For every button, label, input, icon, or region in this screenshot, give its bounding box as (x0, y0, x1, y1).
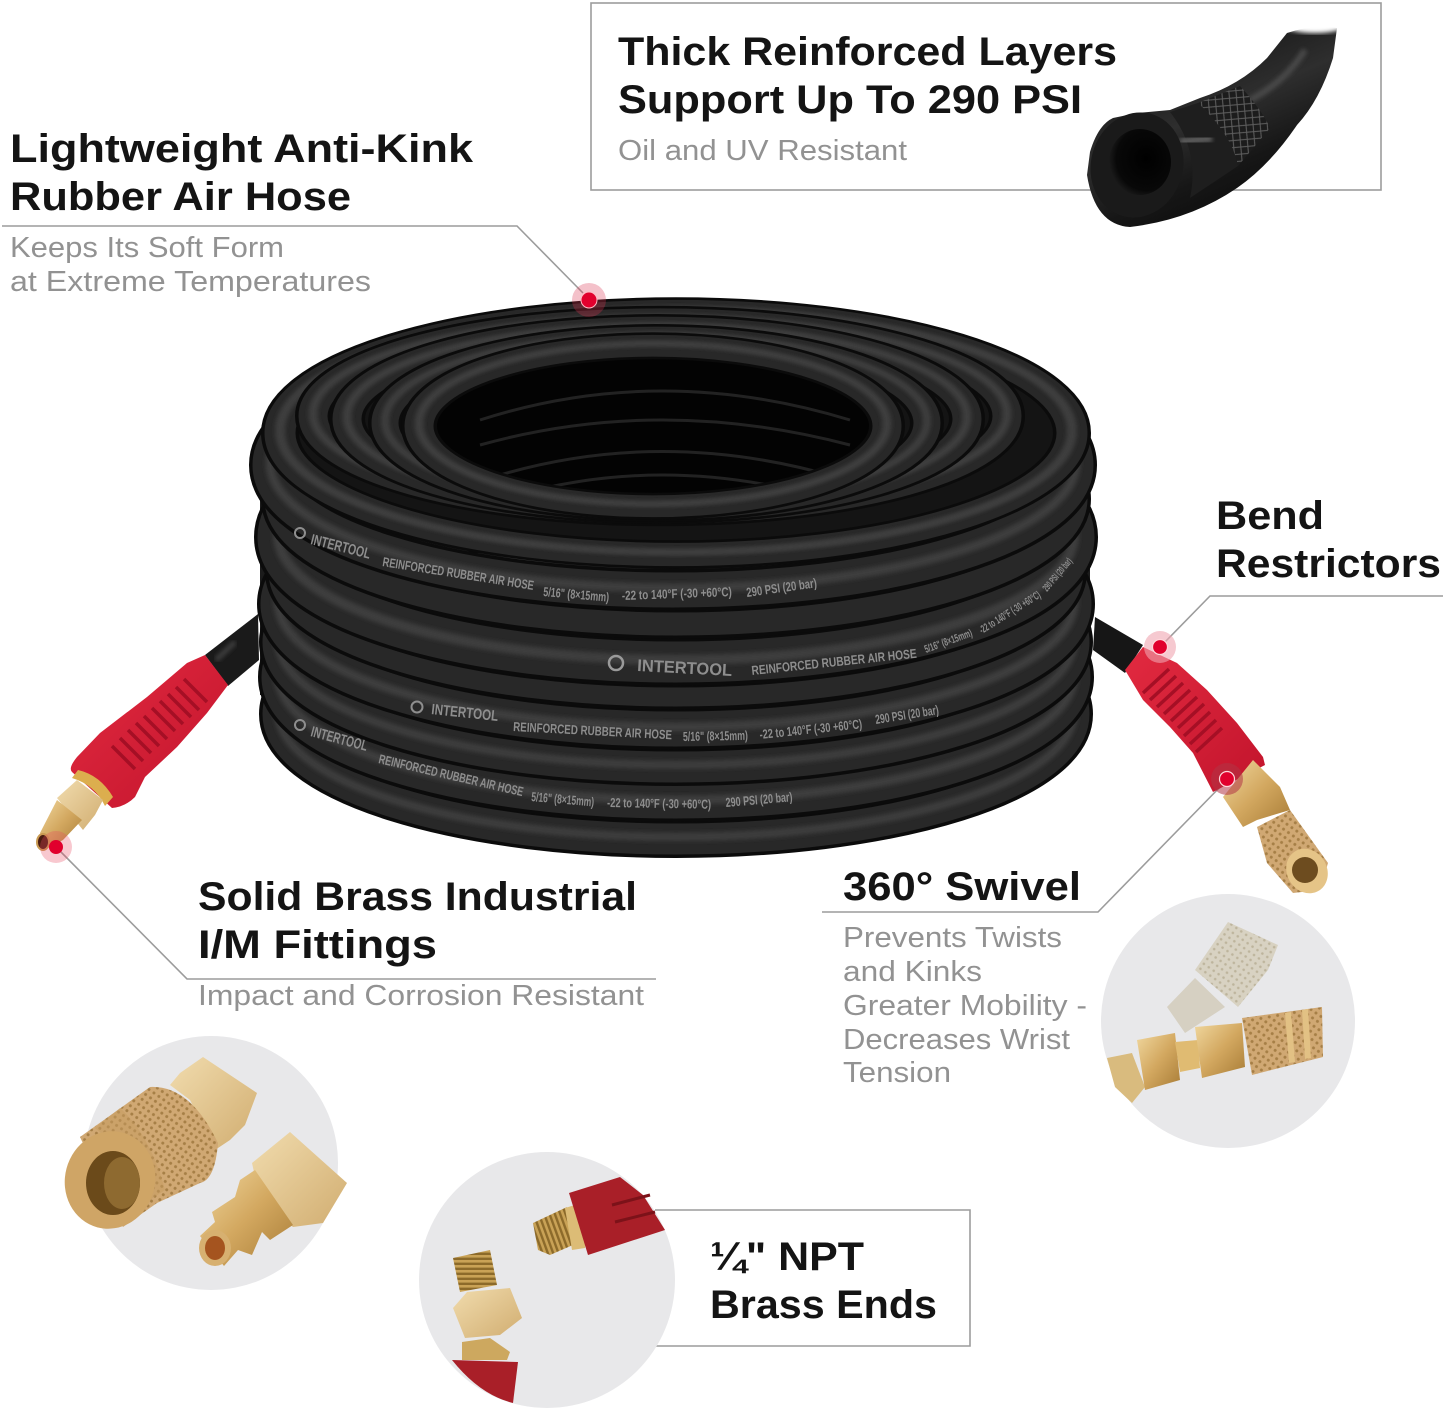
photo circle: swivel fitting (1101, 894, 1355, 1148)
coupler (54, 1057, 257, 1239)
heading: lightweight anti-kink: Lightweight Anti-Kink (10, 127, 474, 171)
marker: brass plug (40, 831, 72, 863)
hose print row 4 (295, 720, 793, 812)
hose print row 2 (609, 556, 1075, 680)
subtext: swivel benefits: and Kinks (843, 956, 982, 988)
panel border (591, 3, 1381, 190)
hose print row 3: REINFORCED RUBBER AIR HOSE (513, 719, 673, 742)
subtext line 1: Keeps Its Soft Form (10, 232, 284, 264)
hose print row 4: REINFORCED RUBBER AIR HOSE (377, 751, 525, 799)
heading: IM fittings: I/M Fittings (198, 923, 437, 967)
heading line 2: Support Up To 290 PSI (618, 78, 1082, 122)
right hose tail with red restrictor and brass coupling (1093, 617, 1336, 901)
hose print row 3: -22 to 140°F (-30 +60°C) (759, 716, 863, 742)
hose print row 4: 290 PSI (20 bar) (725, 789, 793, 810)
red end with thread (533, 1177, 665, 1255)
icon: hose cross-section (1079, 15, 1347, 228)
panel: quarter NPT brass ends (655, 1210, 970, 1346)
ring two (313, 317, 1007, 513)
subtext: swivel benefits: Greater Mobility - (843, 990, 1087, 1022)
ghost swivel position (1167, 922, 1278, 1033)
hose print row 2: INTERTOOL (637, 656, 733, 680)
subtext: impact: Impact and Corrosion Resistant (198, 980, 644, 1012)
solid swivel (1107, 1007, 1323, 1103)
inner coil wall (480, 390, 850, 486)
hose print row 1: 5/16" (8×15mm) (543, 584, 610, 605)
hose print row 3: INTERTOOL (431, 701, 499, 725)
panel: thick reinforced layers (591, 3, 1381, 228)
subtext: oil and UV: Oil and UV Resistant (618, 135, 907, 167)
subtext: swivel benefits: Decreases Wrist (843, 1024, 1070, 1056)
panel border (655, 1210, 970, 1346)
heading: quarter NPT: ¼" NPT (710, 1235, 864, 1279)
hose print row 3: 5/16" (8×15mm) (683, 728, 748, 744)
hose print row 4: -22 to 140°F (-30 +60°C) (607, 795, 711, 812)
hose print row 4: 5/16" (8×15mm) (531, 789, 595, 809)
photo circle: coupler and plug (54, 1036, 347, 1290)
hose print row 2: REINFORCED RUBBER AIR HOSE (751, 646, 918, 678)
front coil rows (270, 338, 1076, 839)
hose print row 1: 290 PSI (20 bar) (745, 575, 818, 600)
heading: restrictors: Restrictors (1216, 542, 1441, 586)
hose print row 1: -22 to 140°F (-30 +60°C) (622, 584, 732, 603)
marker: bend restrictor (1144, 631, 1176, 663)
top coil rings (271, 303, 1081, 563)
ring four (385, 334, 927, 509)
heading: brass ends: Brass Ends (710, 1283, 937, 1327)
hose print row 4: INTERTOOL (309, 723, 369, 755)
heading: solid brass: Solid Brass Industrial (198, 875, 637, 919)
left hose tail with red restrictor and brass plug (37, 614, 259, 850)
marker: top of hose (572, 283, 606, 317)
swivel end with thread (452, 1250, 522, 1403)
hose print row 2: 5/16" (8×15mm) (923, 627, 974, 656)
inner ring (419, 344, 887, 506)
panel: solid brass fittings (198, 875, 644, 1012)
heading line 2: Rubber Air Hose (10, 175, 351, 219)
plug (199, 1132, 347, 1266)
hose print row 1: REINFORCED RUBBER AIR HOSE (382, 554, 535, 593)
heading: thick reinforced layers: Thick Reinforced Layers (618, 30, 1117, 74)
marker: swivel (1211, 763, 1243, 795)
panel: bend restrictors (1216, 494, 1441, 586)
coiled rubber air hose (260, 303, 1090, 839)
hose print row 2: -22 to 140°F (-30 +60°C) (977, 589, 1043, 637)
heading: bend: Bend (1216, 494, 1324, 538)
photo circle: NPT brass ends (419, 1152, 675, 1408)
hose print row 2: 290 PSI (20 bar) (1041, 556, 1075, 594)
panel: 360 swivel (843, 865, 1087, 1089)
outer ring (280, 309, 1072, 554)
subtext: swivel benefits: Prevents Twists (843, 922, 1062, 954)
heading: 360 swivel: 360° Swivel (843, 865, 1081, 909)
hose print row 1: INTERTOOL (309, 531, 372, 563)
panel: lightweight anti-kink hose (10, 127, 474, 298)
coil body fill (260, 470, 1090, 695)
hose print row 3 (412, 701, 940, 744)
ring three (347, 325, 967, 510)
subtext: swivel benefits: Tension (843, 1057, 951, 1089)
leader lines (2, 226, 1443, 979)
subtext: swivel benefits (843, 922, 1087, 1089)
hose print row 1 (295, 528, 818, 605)
hose print row 3: 290 PSI (20 bar) (874, 702, 940, 727)
subtext line 2: at Extreme Temperatures (10, 266, 371, 298)
